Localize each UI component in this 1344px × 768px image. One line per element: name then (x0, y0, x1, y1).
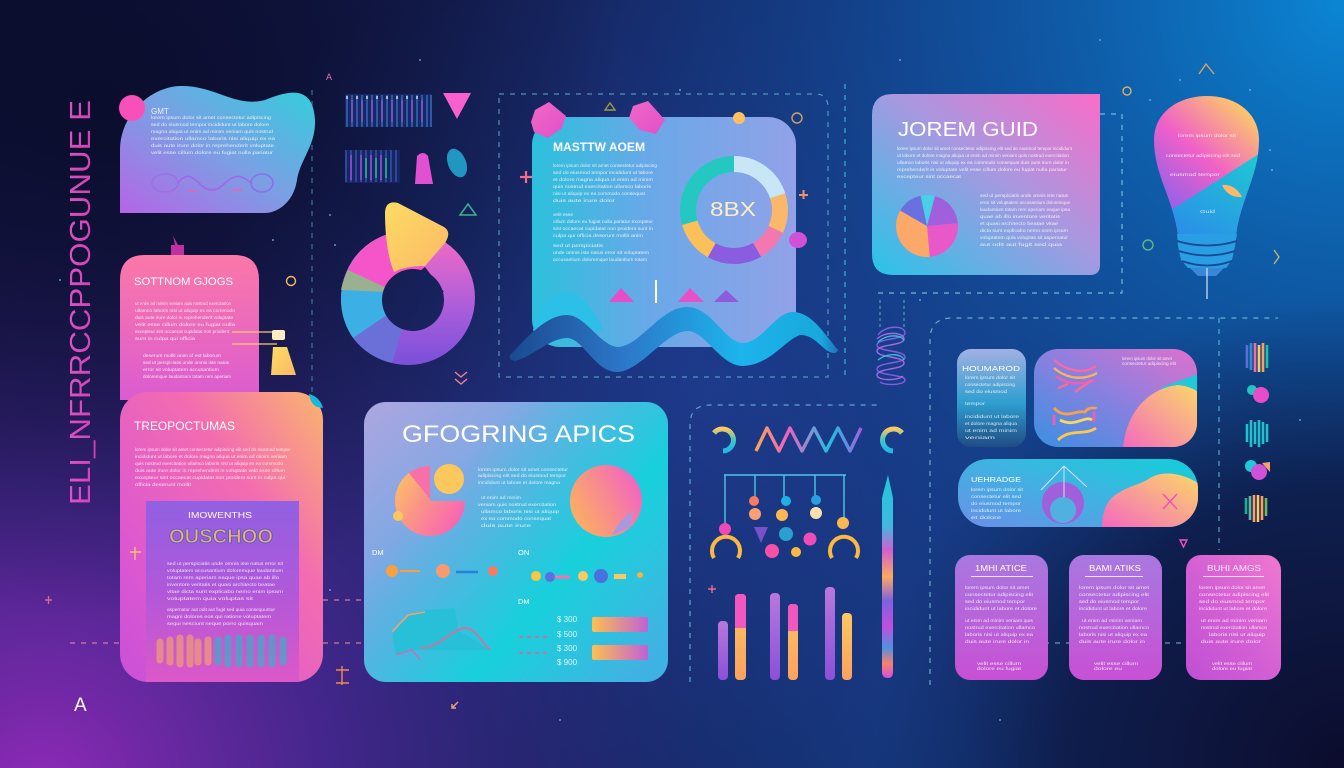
mobile beads (712, 495, 858, 558)
text block: sed ut perspiciatis unde omnis iste natus (143, 360, 230, 365)
panel: top-left blob (119, 86, 315, 213)
icon: ribbons bottom (1054, 407, 1096, 440)
text block: veniam quis nostrud exercitation (478, 502, 557, 507)
text block (151, 115, 276, 155)
text block: velit esse (553, 212, 573, 217)
icon: small triangle (605, 103, 615, 110)
text block: error sit voluptatem accusantium doloremque (980, 200, 1070, 205)
card text: velit esse cillum (1094, 661, 1138, 666)
panel: long teal card (958, 459, 1198, 527)
text block: ex ea commodo consequat (481, 516, 552, 521)
panel: card 2 (1069, 555, 1162, 680)
text block: doloremque laudantium totam rem aperiam (143, 374, 231, 379)
mobile rods (724, 475, 846, 525)
text block: sed do eiusmod tempor incididunt ut labore dolore (151, 122, 270, 127)
panel: graphic apis (364, 402, 668, 682)
card text: laboris nisi ut aliquip ex ea (1079, 632, 1148, 637)
decorative small icons (45, 64, 1279, 708)
chart: pie (896, 195, 958, 257)
inner text block: totam rem aperiam eaque ipsa quae ab illo (167, 575, 280, 580)
text block: nisi ut aliquip ex ea commodo consequat (553, 191, 646, 196)
text block: officia deserunt mollit (135, 482, 192, 487)
text block: excepteur sint occaecat cupidatat non proident (135, 329, 230, 334)
card text: do eiusmod tempor (971, 501, 1022, 506)
icon: striped glyph 2 (1247, 420, 1267, 447)
card text: velit esse cillum (1212, 661, 1252, 666)
chart: right pie (570, 465, 642, 537)
text block: sed ut perspiciatis (553, 243, 604, 248)
text block: duis aute irure dolor in reprehenderit voluptate (135, 315, 233, 320)
icon: teal oval (443, 146, 471, 180)
text block: duis aute irure dolor (553, 198, 616, 203)
gauge value: 8BX (710, 199, 756, 221)
text block: voluptatem quia voluptas sit aspernatur (980, 235, 1069, 240)
card text: nostrud exercitation ullamco (965, 625, 1036, 630)
panel heading: MASTTW AOEM (553, 140, 645, 154)
icon: cross (1163, 494, 1177, 509)
panel: top-right guide (872, 94, 1100, 275)
card text: consectetur adipiscing elit (965, 592, 1034, 597)
icon: striped glyph 3 (1246, 495, 1266, 522)
text block: quae ab illo inventore veritatis (980, 214, 1061, 219)
orange bars (592, 617, 648, 660)
text block: ut labore et dolore magna aliqua ut enim ad minim veniam quis nostrud exercitation (897, 153, 1069, 158)
icon: small bug (286, 276, 296, 286)
text block: excepteur sint occaecat (897, 174, 962, 179)
text block: quis nostrud exercitation ullamco laboris nisi ut aliquip ex ea commodo (135, 461, 283, 466)
icon: arch (1199, 64, 1214, 74)
text block: deserunt mollit anim id est laborum (143, 353, 221, 358)
text block: unde omnis iste natus error sit voluptatem (553, 250, 649, 255)
inner text block: vitae dicta sunt explicabo nemo enim ipsam (167, 589, 283, 594)
text block: lorem ipsum dolor sit amet consectetur adipiscing (151, 115, 272, 120)
card heading: BAMI ATIKS (1089, 564, 1141, 573)
dots row right (531, 569, 643, 583)
icon: zigzag wave (756, 428, 861, 451)
text block (553, 163, 657, 262)
chart: hanging mobile and bars (712, 428, 902, 680)
icon: striped glyph 1 (1247, 343, 1267, 372)
legend values: $ 900 (557, 658, 578, 667)
bulb text: Guid (1200, 209, 1216, 214)
card text: duis aute irure dolor in (965, 639, 1030, 644)
bulb text: consectetur adipiscing elit sed (1166, 153, 1241, 158)
card text (1199, 585, 1270, 671)
text block (980, 193, 1070, 247)
tick marks (519, 637, 550, 653)
text block: lorem ipsum dolor sit amet consectetur adipiscing elit sed do eiusmod tempor incididunt (897, 146, 1073, 151)
card text: incididunt ut labore (971, 508, 1022, 513)
card text: ut enim ad minim veniam (1201, 618, 1267, 623)
card text: ut enim ad minim veniam quis (965, 618, 1034, 623)
text block: ullamco laboris nisi ut aliquip ex ea commodo consequat duis aute irure dolor in (897, 160, 1069, 165)
bars (718, 587, 852, 680)
blob (1123, 385, 1198, 449)
icon: lightbulb (1154, 96, 1265, 299)
card text: lorem ipsum dolor sit (965, 375, 1016, 380)
card text: velit esse cillum (977, 661, 1021, 666)
card text: consectetur adipiscing (965, 382, 1015, 387)
card heading: 1MHI ATICE (975, 564, 1027, 573)
text block: ullamco laboris nisi ut aliquip (481, 509, 560, 514)
text block (478, 467, 569, 528)
bulb base (1177, 234, 1237, 299)
icon: spring coil (877, 300, 905, 384)
mini pink mountains (609, 280, 739, 303)
card text: lorem ipsum dolor sit (971, 487, 1024, 492)
chart: left pie (393, 464, 465, 536)
card text: consectetur adipiscing elit (1122, 361, 1177, 366)
inner display word: OUSCHOO (169, 526, 273, 548)
icon: pink circle (119, 95, 145, 121)
text block: ut enim ad minim (481, 495, 521, 500)
text block: velit esse cillum dolore eu fugiat nulla (135, 322, 236, 327)
icon: pin on top of panel (171, 236, 184, 255)
inner text block: magni dolores eos qui ratione voluptatem (167, 614, 271, 619)
icon: pink triangle (443, 93, 471, 119)
inner heading: IMOWENTHS (188, 511, 252, 520)
icon: pink trapezoid (415, 153, 433, 184)
text block: culpa qui officia deserunt mollit anim (553, 233, 643, 238)
text block: sint occaecat cupidatat non proident sunt in (553, 226, 653, 231)
icon: yellow lamp stand (232, 330, 296, 375)
chart: donut (341, 202, 475, 365)
panel heading: JOREM GUID (898, 119, 1038, 141)
icon: orange glyph (336, 666, 349, 685)
icon: top A mark: A (326, 72, 332, 82)
text block: magna aliqua ut enim ad minim veniam quis nostrud (151, 129, 273, 134)
small label: ON (518, 548, 529, 557)
text block: lorem ipsum dolor sit amet consectetur adipiscing elit sed do eiusmod tempor (135, 447, 290, 452)
icon: small ring right (1123, 87, 1131, 95)
text block: et quasi architecto beatae vitae (980, 221, 1059, 226)
text block: reprehenderit in voluptate velit esse cillum dolore eu fugiat nulla pariatur (897, 167, 1068, 172)
ribbon wave (510, 307, 838, 372)
text block: cillum dolore eu fugiat nulla pariatur excepteur (553, 219, 653, 224)
inner text block: voluptatem quia voluptas sit (167, 596, 254, 601)
card text: incididunt ut labore (965, 414, 1020, 419)
icon: corner bug (792, 113, 802, 123)
legend values: $ 300 (557, 644, 578, 653)
text block (897, 146, 1073, 179)
inner text block (167, 561, 284, 626)
card text: laboris nisi ut aliquip (1209, 632, 1266, 637)
card text: consectetur adipiscing elit (1079, 592, 1150, 597)
bulb text: lorem ipsum dolor sit (1178, 133, 1237, 138)
panel: card 3 (1186, 555, 1281, 680)
text block: dicta sunt explicabo nemo enim ipsam (980, 228, 1068, 233)
panel: large pink article (120, 392, 323, 682)
card text: lorem ipsum dolor sit amet (965, 585, 1030, 590)
text block (135, 447, 290, 487)
icon: plus (520, 171, 532, 183)
text block: lorem ipsum dolor sit amet consectetur adipiscing (553, 163, 657, 168)
inner text block: voluptatem accusantium doloremque laudantium (167, 568, 283, 573)
card text: veniam (965, 435, 995, 440)
icon: yellow mark (130, 547, 141, 560)
card heading: HOUMAROD (962, 364, 1021, 373)
card text: et dolore magna aliqua (965, 421, 1017, 426)
blob (1102, 474, 1198, 527)
panel heading: GMT (151, 107, 169, 116)
icon: crescent right (883, 429, 902, 451)
card text: nostrud exercitation ullamco (1201, 625, 1268, 630)
card text: incididunt ut labore et dolore (1199, 606, 1268, 611)
icon: hanging orb (1041, 466, 1087, 524)
icon: pink gem right (629, 101, 665, 134)
inner bar pattern (160, 638, 283, 664)
text block: incididunt ut labore et dolore magna (478, 480, 560, 485)
card text: nostrud exercitation ullamco (1079, 625, 1150, 630)
text block: aut odit aut fugit sed quia (980, 242, 1063, 247)
text block: excepteur sint occaecat cupidatat non proident sunt in culpa qui (135, 475, 285, 480)
text block: lorem ipsum dolor sit amet consectetur (478, 467, 569, 472)
inner text block: inventore veritatis et quasi architecto beatae (167, 582, 276, 587)
dashed connector lines (70, 84, 1278, 685)
legend values: $ 500 (557, 630, 578, 639)
icon: teal and magenta blobs (1245, 460, 1270, 480)
text block: accusantium doloremque laudantium totam (553, 257, 647, 262)
icon: yellow dot (733, 112, 745, 124)
icon: crescent left (714, 429, 733, 451)
icon: barcode strip 2 (345, 150, 400, 183)
icon: yellow play triangle (385, 202, 448, 272)
icon: small plus (708, 585, 716, 593)
text block: sunt in culpa qui officia (135, 336, 196, 341)
card text: incididunt ut labore et dolore (1079, 606, 1148, 611)
icon column right (1245, 343, 1270, 522)
card text (965, 585, 1038, 671)
letter A bottom left: A (74, 695, 87, 716)
card heading: UEHRADGE (971, 475, 1021, 484)
card text: duis aute irure dolor (1201, 639, 1262, 644)
small label: DM (518, 597, 530, 606)
text block: error sit voluptatem accusantium (143, 367, 219, 372)
card text: incididunt ut labore et dolore (965, 606, 1038, 611)
inner text block: sed ut perspiciatis unde omnis iste natus error sit (167, 561, 284, 566)
card text: sed do eiusmod (965, 389, 1008, 394)
small label: DM (372, 548, 384, 557)
icon: ribbons top (1054, 360, 1097, 392)
text block: laudantium totam rem aperiam eaque ipsa (980, 207, 1070, 212)
panel: card 1 (955, 555, 1048, 680)
vertical side title: ELI_NFRRCCPPOGUNUE E (65, 100, 97, 505)
inner text block: aspernatur aut odit aut fugit sed quia consequuntur (167, 607, 275, 612)
panel: inner purple block (146, 501, 299, 682)
text block: adipiscing elit sed do eiusmod tempor (478, 473, 567, 478)
text block: velit esse cillum dolore eu fugiat nulla pariatur (151, 150, 274, 155)
inner text block: sequi nesciunt neque porro quisquam (167, 621, 263, 626)
panel heading: TREOPOCTUMAS (134, 421, 235, 433)
text block: sed ut perspiciatis unde omnis iste natus (980, 193, 1069, 198)
text block: sed do eiusmod tempor incididunt ut labore (553, 170, 653, 175)
card text: laboris nisi ut aliquip ex ea (965, 632, 1034, 637)
icon: small triangle (1180, 540, 1187, 547)
card text (965, 375, 1020, 440)
card text: tempor (965, 401, 986, 406)
card text: lorem ipsum dolor sit amet (1199, 585, 1266, 590)
card text: lorem ipsum dolor sit amet (1122, 356, 1173, 361)
card text: sed do eiusmod tempor (1079, 599, 1140, 604)
teal corner (1160, 374, 1197, 392)
card heading: BUHI AMGS (1207, 564, 1261, 573)
text block: ut enim ad minim veniam quis nostrud exercitation (135, 301, 231, 306)
chart: area (392, 608, 490, 660)
text block: duis aute irure dolor in reprehenderit in voluptate velit esse cillum (135, 468, 285, 473)
pencil (882, 475, 893, 678)
card text: consectetur adipiscing elit (1199, 592, 1270, 597)
text block (135, 301, 236, 379)
text block: et dolore magna aliqua ut enim ad minim (553, 177, 653, 182)
panel: small teal card (957, 349, 1026, 447)
card text: dolore eu fugiat (977, 666, 1022, 671)
card text (971, 487, 1024, 520)
text block: ullamco laboris nisi ut aliquip ex ea commodo (135, 308, 235, 313)
panel heading: GFOGRING APICS (402, 421, 635, 448)
icon: chevrons (455, 372, 467, 384)
legend values: $ 300 (557, 615, 578, 624)
bulb text: eiusmod tempor (1170, 172, 1221, 177)
legend values (557, 615, 578, 667)
panel: main blue article (510, 101, 838, 372)
icon: ring green (1143, 240, 1153, 250)
card text: ut enim ad minim veniam (1082, 618, 1142, 623)
icon: pink gem left (531, 102, 566, 138)
icon: looping wave (152, 174, 273, 192)
text block: duis aute irure dolor in reprehenderit voluptate (151, 143, 275, 148)
card text: sed do eiusmod tempor (1199, 599, 1266, 604)
card text: duis aute irure dolor in (1079, 639, 1146, 644)
card text: et dolore (971, 515, 1002, 520)
text block: quis nostrud exercitation ullamco laboris (553, 184, 652, 189)
icon: orange cross (45, 596, 52, 604)
panel: pink article (120, 236, 259, 400)
icon: barcode strip 1 (345, 94, 432, 127)
panel: wide gradient card (1034, 349, 1198, 449)
icon: small flower (799, 190, 808, 199)
card text: consectetur elit sed (971, 494, 1022, 499)
card text: ut enim ad minim (965, 428, 1017, 433)
icon: arrow (452, 702, 458, 708)
icon: small triangle (460, 204, 476, 215)
dots row left (386, 564, 498, 578)
card text: dolore eu (1094, 666, 1123, 671)
card text: lorem ipsum dolor sit amet (1079, 585, 1150, 590)
panel heading: SOTTNOM GJOGS (134, 276, 233, 288)
card text: dolore eu fugiat (1212, 666, 1253, 671)
chart: ring gauge (688, 164, 780, 256)
card text (1122, 356, 1177, 366)
text block: duis aute irure (481, 523, 532, 528)
card text: sed do eiusmod tempor (965, 599, 1026, 604)
cyan hill behind ribbon (533, 292, 604, 345)
icon: chevron right (1274, 250, 1279, 264)
text block: exercitation ullamco laboris nisi aliquip ex ea (151, 136, 276, 141)
bulb text (1166, 133, 1241, 214)
icon: magenta blob (789, 232, 807, 248)
card text (1079, 585, 1150, 671)
icon: teal and magenta dots (1247, 385, 1269, 403)
text block: incididunt ut labore et dolore magna aliqua ut enim ad minim veniam (135, 454, 287, 459)
